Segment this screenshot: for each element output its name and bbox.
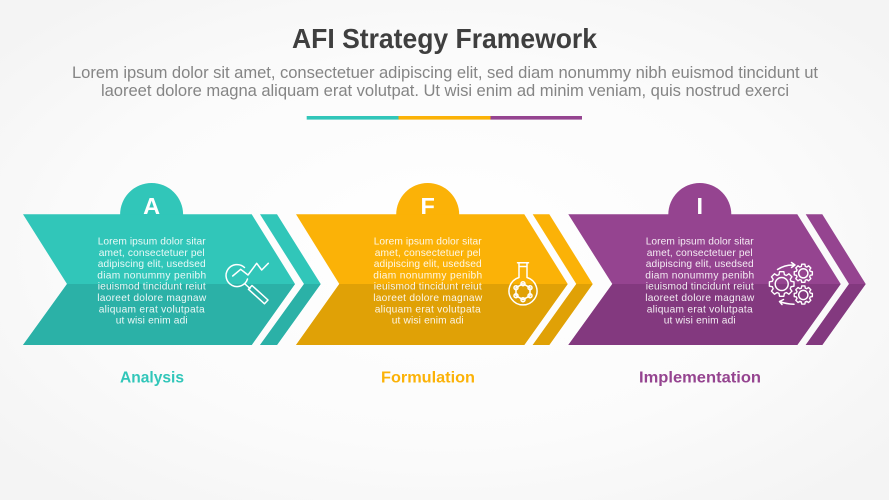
body text: formulation: Lorem ipsum dolor sitar	[374, 236, 482, 248]
subtitle text	[72, 63, 818, 100]
tricolor divider	[307, 116, 582, 120]
body text: implementation: ut wisi enim adi	[664, 316, 736, 327]
subtitle text: laoreet dolore magna aliquam erat volutpat. Ut wisi enim ad minim veniam, quis nostrud exerci	[101, 81, 789, 100]
badge: A	[120, 183, 183, 246]
body text: analysis: diam nonummy penibh	[97, 270, 206, 281]
body text: analysis: adipiscing elit, usedsed	[98, 259, 206, 270]
badge: F	[396, 183, 459, 246]
body text: implementation: ieuismod tincidunt reiut	[646, 282, 754, 293]
body text: analysis: laoreet dolore magnaw	[97, 293, 207, 304]
body text: formulation	[373, 236, 483, 327]
body text: implementation	[645, 236, 755, 327]
body text: analysis: amet, consectetuer pel	[99, 248, 205, 259]
body text: formulation: amet, consectetuer pel	[375, 248, 481, 259]
label: Formulation: Formulation	[381, 370, 475, 386]
body text: implementation: adipiscing elit, usedsed	[646, 259, 754, 270]
main arrow: teal	[23, 214, 295, 345]
badge: A: A	[143, 193, 160, 219]
body text: implementation: aliquam erat volutpata	[647, 304, 753, 315]
icon: flask	[509, 263, 537, 305]
panel: analysis	[23, 183, 321, 386]
main arrow: purple	[568, 214, 841, 345]
panel: formulation	[296, 183, 593, 386]
body text: implementation: amet, consectetuer pel	[647, 248, 753, 259]
subtitle text: Lorem ipsum dolor sit amet, consectetuer adipiscing elit, sed diam nonummy nibh euismod tincidunt ut	[72, 63, 818, 82]
body text: implementation: Lorem ipsum dolor sitar	[646, 236, 754, 248]
body text: analysis: ieuismod tincidunt reiut	[98, 282, 206, 293]
body text: formulation: aliquam erat volutpata	[375, 304, 481, 315]
body text: formulation: ut wisi enim adi	[392, 316, 464, 327]
body text: analysis: ut wisi enim adi	[116, 316, 188, 327]
body text: formulation: diam nonummy penibh	[373, 270, 482, 281]
body text: formulation: laoreet dolore magnaw	[373, 293, 483, 304]
panel: implementation	[568, 183, 866, 386]
chevron: teal	[260, 214, 321, 345]
label: Implementation: Implementation	[639, 370, 761, 386]
body text: implementation: diam nonummy penibh	[645, 270, 754, 281]
badge: F: F	[421, 193, 435, 219]
body text: analysis: aliquam erat volutpata	[99, 304, 205, 315]
label: Analysis: Analysis	[120, 370, 184, 386]
icon: magnifier with chart line	[226, 263, 268, 304]
badge: I: I	[697, 193, 703, 219]
chevron: gold	[533, 214, 593, 345]
body text: analysis: Lorem ipsum dolor sitar	[98, 236, 206, 248]
chevron: purple	[806, 214, 866, 345]
icon: gears with cycle arrows	[769, 262, 812, 304]
body text: formulation: ieuismod tincidunt reiut	[374, 282, 482, 293]
badge: I	[668, 183, 731, 246]
body text: analysis	[97, 236, 207, 327]
title: AFI Strategy Framework	[292, 23, 597, 54]
main arrow: gold	[296, 214, 568, 345]
body text: formulation: adipiscing elit, usedsed	[374, 259, 482, 270]
body text: implementation: laoreet dolore magnaw	[645, 293, 755, 304]
